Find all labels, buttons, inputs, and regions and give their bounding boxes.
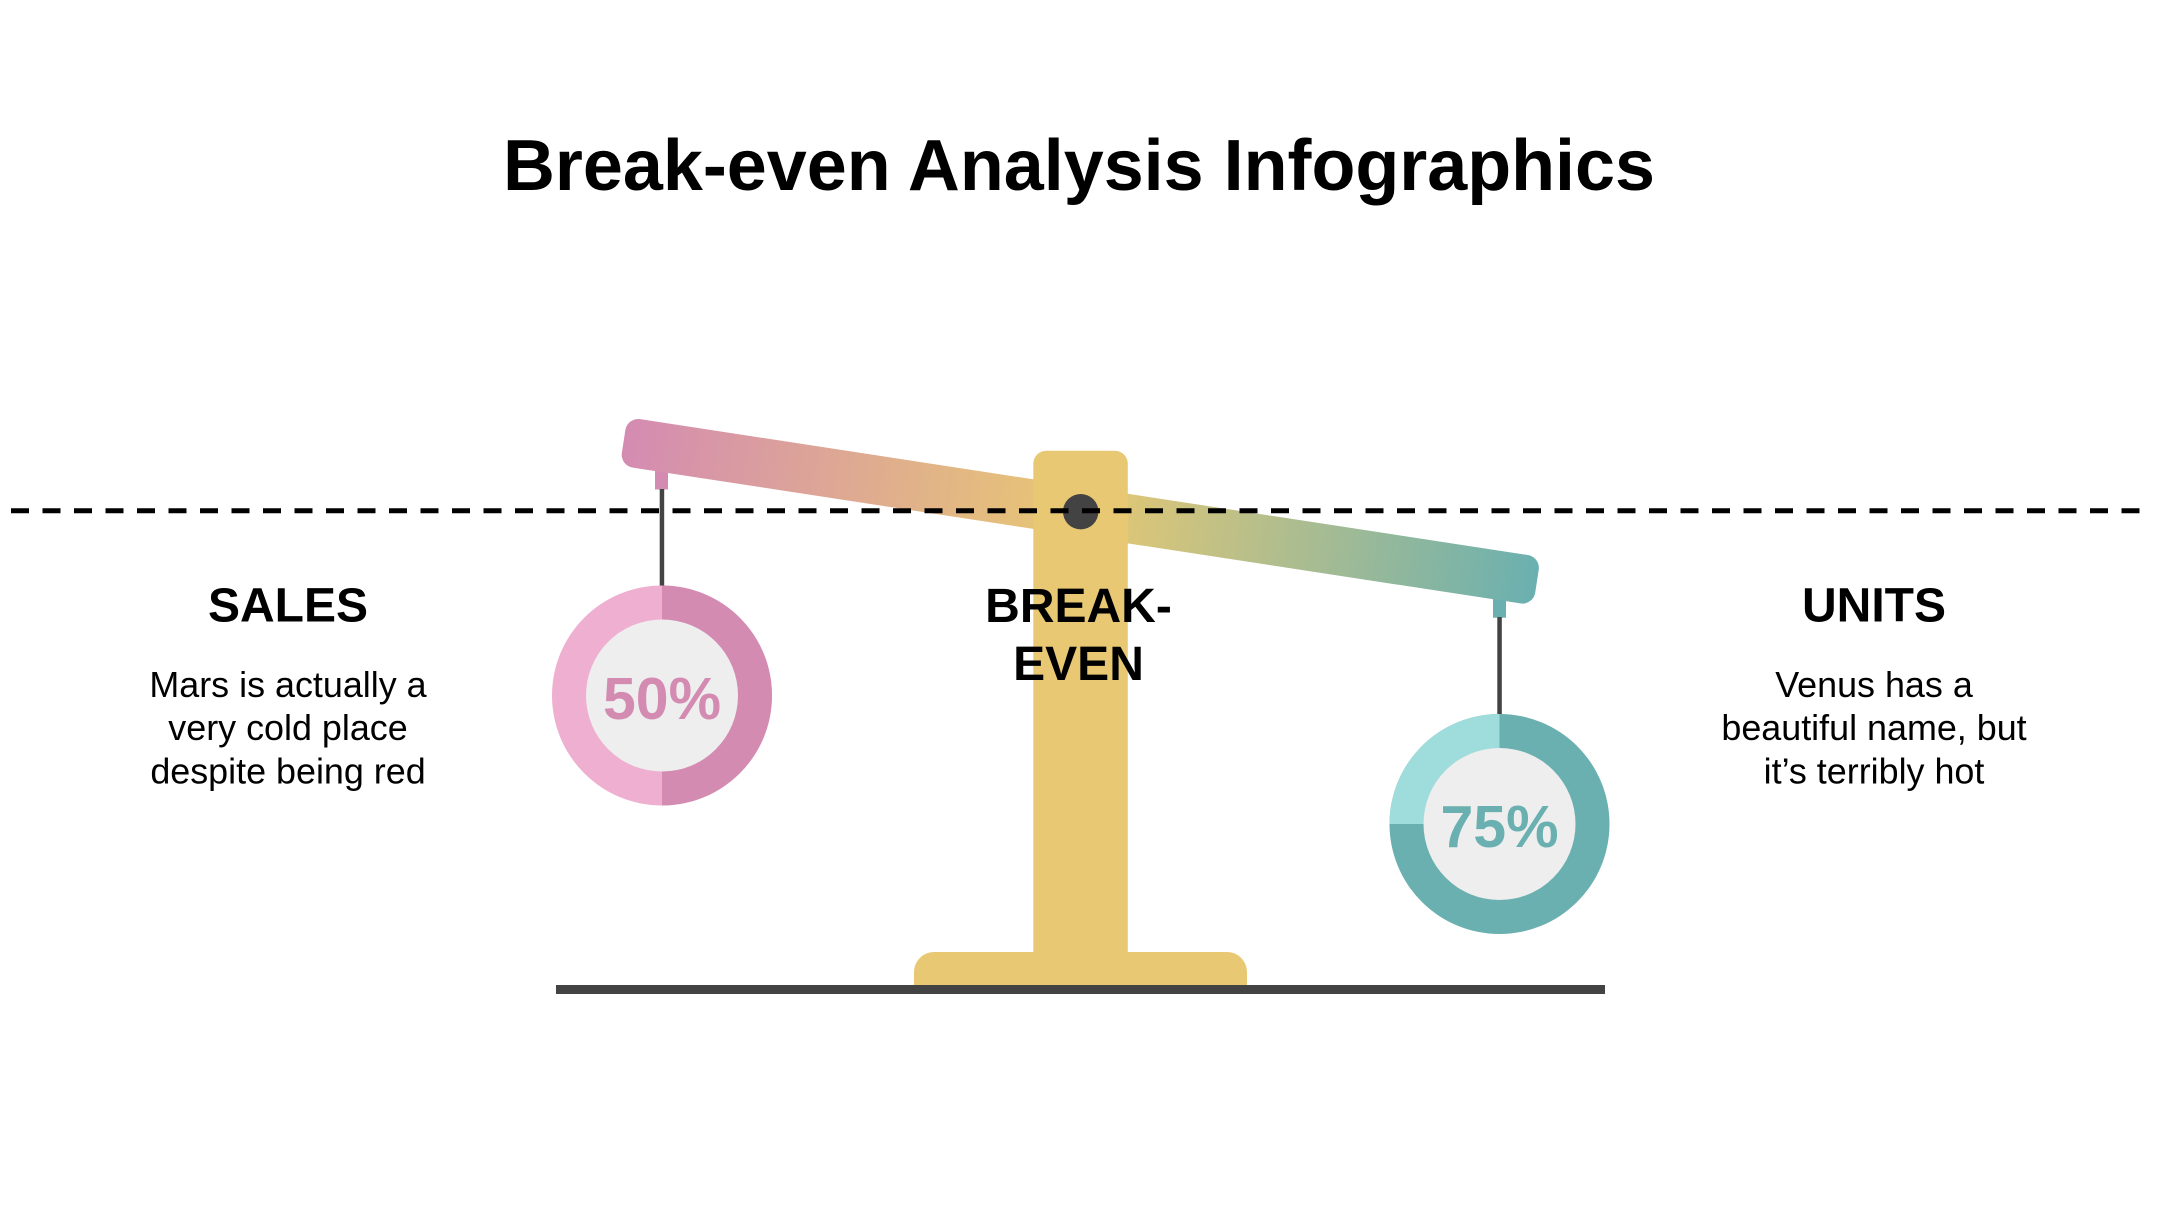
text block: sales: Mars is actually a bbox=[149, 665, 427, 705]
dashed break-even line bbox=[11, 508, 2140, 513]
heading: break-even: BREAK- bbox=[985, 580, 1172, 633]
text block: sales: very cold place bbox=[168, 708, 408, 748]
donut: 75%: 75% bbox=[1440, 794, 1559, 860]
text block: units: beautiful name, but bbox=[1721, 708, 2027, 748]
donut: 50% bbox=[552, 586, 772, 806]
pivot bbox=[1063, 494, 1098, 529]
text block: units: UNITS bbox=[1802, 580, 1946, 633]
text block: units: it’s terribly hot bbox=[1764, 751, 1984, 791]
text block: units: Venus has a bbox=[1775, 665, 1973, 705]
text block: units bbox=[1721, 580, 2027, 791]
text block: sales: despite being red bbox=[150, 751, 426, 791]
title: Break-even Analysis Infographics bbox=[503, 126, 1655, 206]
donut: 75% bbox=[1390, 714, 1610, 934]
hanger: right bbox=[1493, 590, 1506, 715]
scale beam bbox=[620, 417, 1541, 605]
hanger: left bbox=[655, 460, 668, 587]
donut: 50%: 50% bbox=[603, 666, 721, 732]
text block: sales: SALES bbox=[208, 580, 368, 633]
scale post and base bbox=[914, 451, 1247, 987]
text block: sales bbox=[149, 580, 427, 791]
heading: break-even: EVEN bbox=[1013, 638, 1144, 691]
ground line bbox=[556, 985, 1605, 994]
